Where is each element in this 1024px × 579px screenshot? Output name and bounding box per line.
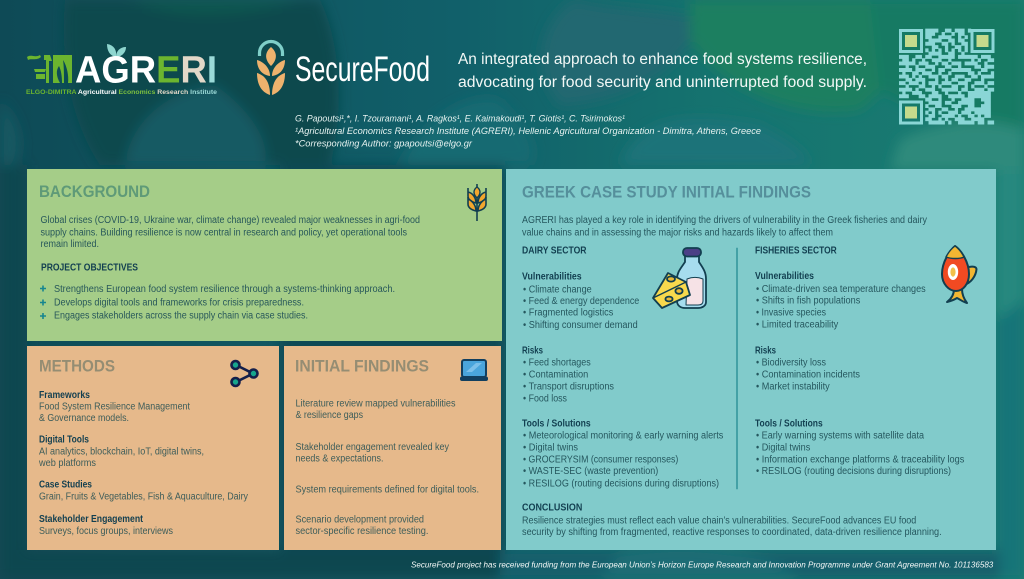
authors and affiliation <box>295 114 761 149</box>
methods: stakeholder engagement <box>39 514 173 537</box>
methods: case studies <box>39 480 248 502</box>
fisheries vulnerabilities: • Climate-driven sea temperature changes <box>756 284 926 295</box>
fisheries tools and solutions: • Digital twins <box>756 443 810 454</box>
methods: digital tools: web platforms <box>38 458 96 469</box>
finding 2 <box>296 442 449 465</box>
dairy vulnerabilities: • Climate change <box>523 285 592 296</box>
fisheries tools and solutions: Tools / Solutions <box>755 419 823 430</box>
SecureFood wordmark: SecureFood <box>295 50 430 89</box>
dairy tools and solutions: • Digital twins <box>523 443 578 454</box>
conclusion: security by shifting from fragmented, reactive responses to coordinated, data-driven resilience planning. <box>522 527 942 538</box>
methods: case studies: Case Studies <box>39 480 92 491</box>
dairy risks: • Transport disruptions <box>523 381 614 392</box>
fisheries tools and solutions: • Information exchange platforms & traceability logs <box>756 454 964 465</box>
authors and affiliation: *Corresponding Author: gpapoutsi@elgo.gr <box>295 139 473 149</box>
fisheries risks <box>755 346 860 392</box>
dairy vulnerabilities: • Fragmented logistics <box>523 308 613 319</box>
dairy tools and solutions: • GROCERYSIM (consumer responses) <box>523 454 678 465</box>
fisheries tools and solutions <box>755 419 964 477</box>
background text: remain limited. <box>40 239 99 250</box>
panel: Greek case study <box>506 169 996 550</box>
methods: frameworks <box>39 390 190 424</box>
intro text: value chains and in assessing the major risks and hazards likely to affect them <box>522 227 833 238</box>
methods: frameworks: Frameworks <box>39 390 90 401</box>
methods: frameworks: Food System Resilience Management <box>39 402 190 413</box>
objectives list: Engages stakeholders across the supply chain via case studies. <box>54 311 308 322</box>
finding 4: sector-specific resilience testing. <box>296 526 428 537</box>
finding 4 <box>296 515 428 537</box>
institute name: ELGO-DIMITRA Agricultural Economics Research Institute <box>26 89 217 96</box>
fisheries risks: Risks <box>755 346 776 357</box>
background text: Global crises (COVID-19, Ukraine war, climate change) revealed major weaknesses in agri-food <box>40 215 420 226</box>
fisheries vulnerabilities <box>755 271 926 330</box>
dairy tools and solutions: • RESILOG (routing decisions during disruptions) <box>523 478 719 489</box>
dairy risks <box>522 346 614 405</box>
dairy tools and solutions: • WASTE-SEC (waste prevention) <box>523 466 658 477</box>
panel: background <box>27 169 502 341</box>
fisheries risks: • Contamination incidents <box>756 370 860 381</box>
dairy vulnerabilities <box>522 272 640 331</box>
dairy vulnerabilities: • Shifting consumer demand <box>523 320 638 331</box>
dairy risks: • Food loss <box>523 394 567 405</box>
subheading: dairy sector: DAIRY SECTOR <box>522 245 586 256</box>
methods: case studies: Grain, Fruits & Vegetables, Fish & Aquaculture, Dairy <box>39 491 248 502</box>
logo: SecureFood <box>257 42 430 95</box>
finding 1: & resilience gaps <box>296 410 363 421</box>
background text: supply chains. Building resilience is now central in research and policy, yet operational tools <box>40 227 407 238</box>
intro text: AGRERI has played a key role in identifying the drivers of vulnerability in the Greek fisheries and dairy <box>522 215 927 226</box>
icon: wheat <box>468 184 486 221</box>
icon: milk bottle and cheese <box>653 248 706 308</box>
heading: methods: METHODS <box>39 358 115 376</box>
fisheries tools and solutions: • RESILOG (routing decisions during disruptions) <box>756 466 951 477</box>
panel: initial findings <box>284 346 501 550</box>
background text <box>40 215 420 250</box>
dairy risks: • Contamination <box>523 370 588 381</box>
column: dairy sector <box>522 245 723 489</box>
heading: background: BACKGROUND <box>39 183 150 201</box>
methods: frameworks: & Governance models. <box>39 413 129 424</box>
title statement: An integrated approach to enhance food systems resilience, <box>458 51 867 68</box>
QR code <box>899 30 994 123</box>
icon: laptop <box>460 360 488 381</box>
icon: wheat in shield arc <box>257 42 285 95</box>
finding 3: System requirements defined for digital tools. <box>296 485 479 496</box>
objectives list <box>40 284 395 322</box>
logo: AGRERI <box>26 44 217 96</box>
subheading: project objectives: PROJECT OBJECTIVES <box>41 263 138 274</box>
heading: Greek case study: GREEK CASE STUDY INITIAL FINDINGS <box>522 183 811 201</box>
conclusion: Resilience strategies must reflect each value chain’s vulnerabilities. SecureFood advances EU food <box>522 515 916 526</box>
methods: stakeholder engagement: Surveys, focus groups, interviews <box>39 526 173 537</box>
conclusion: CONCLUSION <box>522 503 582 514</box>
objectives list: Strengthens European food system resilience through a systems-thinking approach. <box>54 284 395 295</box>
methods: digital tools: Digital Tools <box>39 435 89 446</box>
panel: methods <box>27 346 279 550</box>
title statement: advocating for food security and uninterrupted food supply. <box>458 74 867 91</box>
dairy vulnerabilities: • Feed & energy dependence <box>523 296 640 307</box>
AGRERI wordmark: AGRERI <box>75 50 217 92</box>
subheading: fisheries sector: FISHERIES SECTOR <box>755 245 837 256</box>
dairy tools and solutions <box>522 419 723 489</box>
icon: sprout leaves <box>107 44 126 57</box>
finding 2: needs & expectations. <box>296 454 384 465</box>
finding 1: Literature review mapped vulnerabilities <box>296 399 456 410</box>
dairy tools and solutions: • Meteorological monitoring & early warning alerts <box>523 431 723 442</box>
finding 1 <box>296 399 456 421</box>
fisheries risks: • Market instability <box>756 381 830 392</box>
funding note: SecureFood project has received funding from the European Union’s Horizon Europe Research and Innovation Programme under Grant Agreement No. 101136583 <box>411 559 993 569</box>
finding 4: Scenario development provided <box>296 515 424 526</box>
icon: share nodes <box>232 361 258 386</box>
heading: initial findings: INITIAL FINDINGS <box>295 358 429 376</box>
divider <box>736 248 738 489</box>
fisheries vulnerabilities: • Invasive species <box>756 308 826 319</box>
icon: AGRERI field pictogram <box>27 55 72 83</box>
dairy risks: Risks <box>522 346 543 357</box>
authors and affiliation: G. Papoutsi¹,*, I. Tzouramani¹, A. Ragkos¹, E. Kaimakoudi¹, T. Giotis¹, C. Tsirimokos¹ <box>295 114 625 124</box>
fisheries vulnerabilities: • Limited traceability <box>756 319 838 330</box>
methods: digital tools <box>38 435 204 469</box>
conclusion <box>522 503 942 538</box>
dairy tools and solutions: Tools / Solutions <box>522 419 591 430</box>
intro text <box>522 215 927 238</box>
dairy vulnerabilities: Vulnerabilities <box>522 272 582 283</box>
methods: stakeholder engagement: Stakeholder Engagement <box>39 514 144 525</box>
fisheries tools and solutions: • Early warning systems with satellite data <box>756 431 925 442</box>
fisheries risks: • Biodiversity loss <box>756 358 826 369</box>
finding 2: Stakeholder engagement revealed key <box>296 442 449 453</box>
fisheries vulnerabilities: Vulnerabilities <box>755 271 814 282</box>
dairy risks: • Feed shortages <box>523 358 591 369</box>
icon: fish <box>942 246 976 303</box>
methods: digital tools: AI analytics, blockchain, IoT, digital twins, <box>39 447 204 458</box>
fisheries vulnerabilities: • Shifts in fish populations <box>756 295 860 306</box>
objectives list: Develops digital tools and frameworks for crisis preparedness. <box>54 298 304 309</box>
title statement <box>458 51 867 91</box>
column: fisheries sector <box>755 245 964 477</box>
authors and affiliation: ¹Agricultural Economics Research Institute (AGRERI), Hellenic Agricultural Organization - Dimitra, Athens, Greece <box>295 126 761 136</box>
